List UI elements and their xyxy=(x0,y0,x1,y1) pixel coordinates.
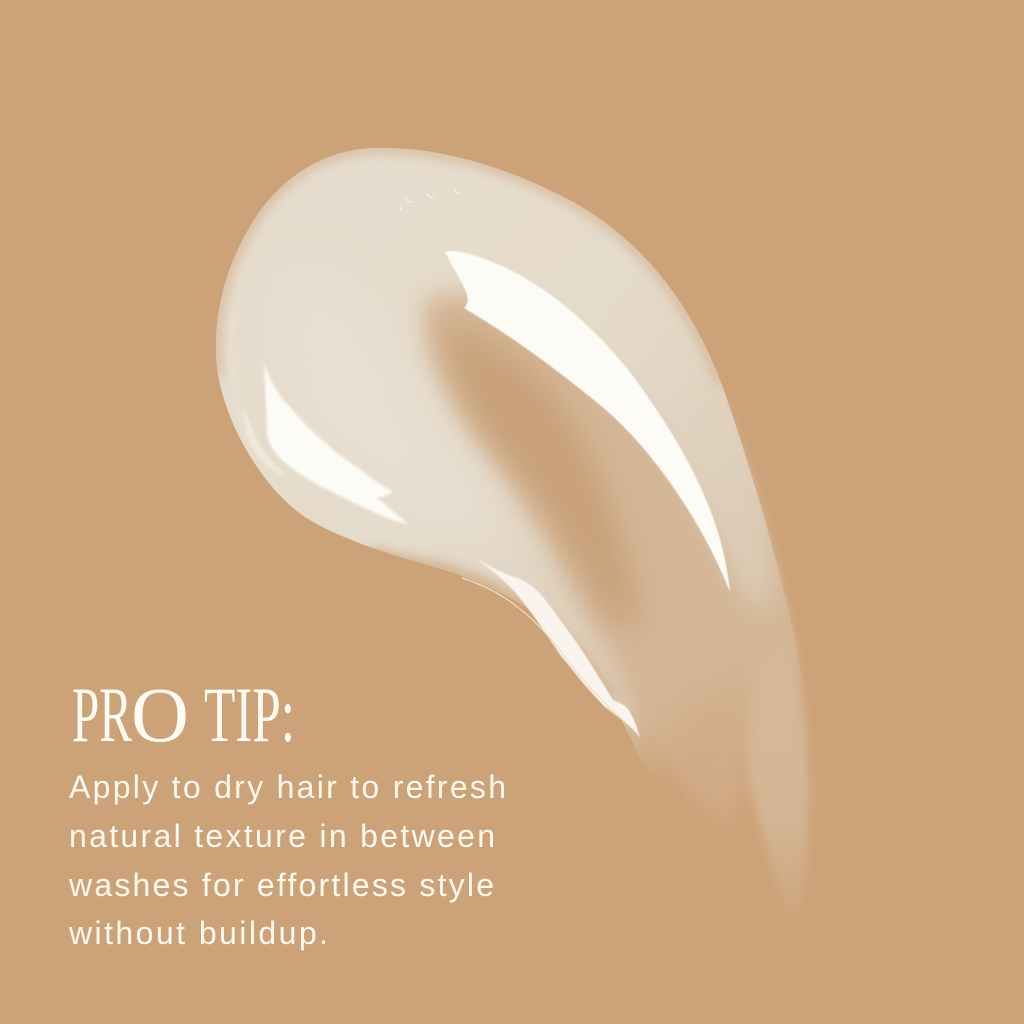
left pale rim xyxy=(231,310,250,440)
smear tail: left fading band xyxy=(640,620,750,838)
body text: washes for effortless style xyxy=(68,867,494,903)
translucent outer edge xyxy=(216,148,722,385)
swatch: cream gel smear xyxy=(216,148,812,901)
left gloss highlight xyxy=(264,363,409,525)
pale edge line under the smear xyxy=(462,578,625,722)
heading: PRO TIP: TIP: xyxy=(204,671,295,758)
body text: without buildup. xyxy=(68,915,328,951)
heading: PRO TIP: O xyxy=(131,671,189,758)
smear tail: right fading band xyxy=(700,400,809,935)
tiny surface bubbles xyxy=(400,189,460,210)
dark translucent streak xyxy=(445,325,640,628)
heading: PRO TIP xyxy=(72,671,295,758)
heading: PRO TIP: PR xyxy=(72,671,132,758)
soft shadow along lower edge xyxy=(370,553,610,700)
body text xyxy=(68,769,506,951)
gel body xyxy=(216,148,798,770)
lower left rim highlight xyxy=(243,408,285,476)
translucent base xyxy=(220,286,798,770)
opaque cream lobe xyxy=(180,120,773,730)
lighter cream fold xyxy=(278,270,540,580)
upper gloss highlight xyxy=(445,251,730,592)
body text: natural texture in between xyxy=(69,818,495,854)
lower edge gloss highlight xyxy=(473,557,640,738)
body text: Apply to dry hair to refresh xyxy=(69,769,506,805)
